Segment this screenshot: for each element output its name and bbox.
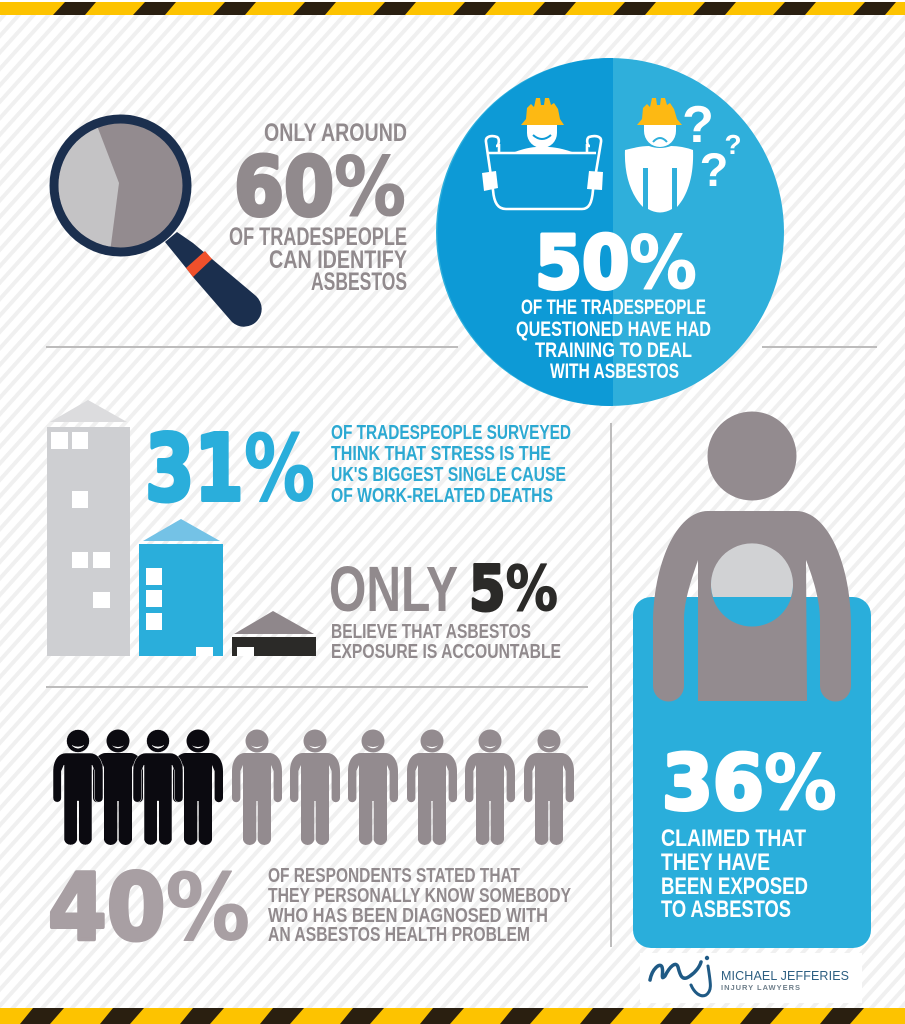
icon: smiling worker with plan [482,98,603,209]
icon: confused worker with question marks [625,96,742,212]
text block: respondents: WHO HAS BEEN DIAGNOSED WITH [268,905,548,927]
pictogram: ten people, four black [53,730,574,845]
text block: stress: UK'S BIGGEST SINGLE CAUSE [331,464,566,486]
icon: confused worker with question marks: ? [682,96,714,154]
caption: exposed: CLAIMED THAT [661,825,806,852]
caption: training: OF THE TRADESPEOPLE [521,296,706,319]
logo: Michael Jefferies: INJURY LAWYERS [721,983,800,992]
text block: respondents: AN ASBESTOS HEALTH PROBLEM [268,924,530,946]
text block: 60 percent: 60% [234,141,406,235]
text block: respondents [268,865,572,946]
stat: only 5 percent: 5% [469,552,558,625]
text block: 60 percent [229,119,407,296]
text block: accountable: EXPOSURE IS ACCOUNTABLE [331,641,561,663]
stat: 31 percent: 31% [145,415,315,522]
stat: 40 percent: 40% [48,854,250,961]
text block: stress [331,422,571,507]
stat: only 5 percent: ONLY [329,553,458,625]
caption: exposed [661,825,808,923]
logo: Michael Jefferies [640,953,862,1003]
caption: training: TRAINING TO DEAL [535,339,692,362]
text block: accountable: BELIEVE THAT ASBESTOS [331,621,531,643]
text block: 60 percent: ONLY AROUND [264,119,407,147]
icon: three buildings [47,400,316,656]
logo: Michael Jefferies: MICHAEL JEFFERIES [721,969,849,983]
bottom hazard stripe [0,1008,905,1024]
stat: 50 percent: 50% [535,221,697,306]
icon: magnifying glass [40,110,262,327]
text block: respondents: THEY PERSONALLY KNOW SOMEBODY [268,885,572,907]
panel: blue circle 50 percent [436,58,784,406]
top hazard stripe [0,2,905,15]
icon: confused worker with question marks: ? [700,143,728,196]
divider lines [46,346,877,947]
caption: exposed: THEY HAVE [661,849,770,876]
caption: training [516,296,711,383]
text block: stress: OF TRADESPEOPLE SURVEYED [331,422,571,444]
stat: 36 percent: 36% [662,738,837,827]
text block: 60 percent: CAN IDENTIFY [269,246,407,274]
icon: confused worker with question marks: ? [724,129,742,160]
text block: 60 percent: OF TRADESPEOPLE [229,223,407,251]
text block: 60 percent: ASBESTOS [311,268,407,296]
text block: accountable [331,621,561,663]
panel: exposed person [633,412,871,948]
caption: exposed: TO ASBESTOS [661,896,791,923]
text block: stress: THINK THAT STRESS IS THE [331,443,551,465]
icon: large person with lungs circle [653,412,851,702]
text block: stress: OF WORK-RELATED DEATHS [331,485,553,507]
caption: training: WITH ASBESTOS [550,360,679,383]
caption: training: QUESTIONED HAVE HAD [516,318,711,341]
caption: exposed: BEEN EXPOSED [661,873,808,900]
text block: respondents: OF RESPONDENTS STATED THAT [268,865,520,887]
